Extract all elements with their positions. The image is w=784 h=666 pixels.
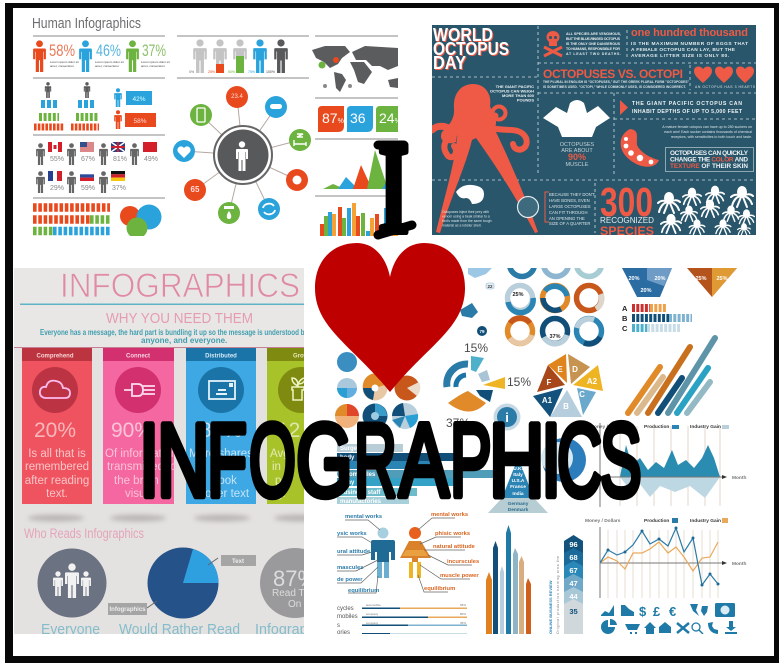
- human anatomy figures: de power: [337, 577, 363, 583]
- flag statistics: 59%: [81, 185, 95, 192]
- weight fact: THE GIANT PACIFIC: [496, 84, 534, 89]
- info pin: i: [505, 410, 509, 425]
- human anatomy figures: mental works: [345, 514, 382, 520]
- one hundred thousand fact: one hundred thousand: [631, 27, 748, 39]
- octopuses vs octopi: OCTOPUSES VS. OCTOPI: [543, 67, 683, 81]
- icon: three hearts: [694, 67, 756, 89]
- pyramid: U.S.A: [512, 478, 525, 484]
- heading: World Octopus Day: DAY: [433, 53, 466, 73]
- venom fact: IS THE ONLY ONE DANGEROUS: [566, 42, 621, 46]
- captions: [41, 621, 333, 638]
- flag statistics: 29%: [50, 185, 64, 192]
- filled people scale: 25%: [208, 70, 215, 74]
- card: distributed: over text: [205, 488, 250, 500]
- arrow stack: 96: [569, 540, 578, 549]
- title: INFOGRAPHICS: C: [557, 403, 602, 519]
- suckers text: [662, 125, 752, 139]
- muscle figure: [543, 100, 610, 168]
- funnel charts: 20%: [628, 276, 640, 282]
- card: distributed: book: [212, 475, 237, 487]
- stat cards: 87%: [322, 110, 344, 126]
- lower bars: 35%: [460, 621, 466, 625]
- percent figures: amet, consectetur: [141, 64, 165, 68]
- abc pictogram rows: C: [622, 324, 628, 333]
- rocket bars: [486, 525, 531, 634]
- muscle figure: MUSCLE: [566, 162, 589, 168]
- funnel charts: [622, 268, 737, 297]
- captions: Would Rather Read: [119, 621, 240, 638]
- pyramid: [488, 458, 548, 513]
- one hundred thousand fact: AVERAGE LITTER SIZE IS ONLY 80.: [631, 53, 729, 59]
- arrow stack: 47: [569, 579, 578, 588]
- pyramid: U.K.: [513, 466, 523, 472]
- percent figures: amet, consectetur: [95, 64, 119, 68]
- icon: quarter coin: [518, 196, 538, 218]
- human anatomy figures: equilibrium: [424, 586, 455, 592]
- heading: World Octopus Day: OCTOPUS: [433, 39, 509, 59]
- circle: everyone: [38, 548, 106, 618]
- lower bars: mobiles: [337, 614, 358, 620]
- human anatomy figures: ysic works: [337, 531, 367, 537]
- people pyramids: [34, 82, 99, 127]
- venom fact: ALL SPECIES ARE VENOMOUS,: [566, 32, 621, 36]
- depths fact: [620, 100, 743, 115]
- card: comprehend: after reading: [25, 475, 89, 487]
- horizontal bars: [337, 444, 497, 505]
- card: connect: 90%: [111, 419, 153, 442]
- venom fact: AT LEAST TWO DEATHS.: [566, 52, 621, 56]
- pentagon chart: E: [557, 365, 563, 374]
- flag statistics: 49%: [144, 156, 158, 163]
- abc pictogram rows: B: [622, 314, 628, 323]
- venom fact: BUT THE BLUE-RINGED OCTOPUS: [566, 37, 621, 41]
- heading: INFOGRAPHICS: INFOGRAPHICS: [60, 267, 300, 305]
- flag statistics: 67%: [81, 156, 95, 163]
- pie chart: Text: [232, 559, 244, 565]
- quarter fact: [545, 192, 595, 226]
- heading: World Octopus Day: [433, 28, 510, 70]
- hub diagram: 65: [191, 185, 200, 194]
- circle: 87 percent: 87%: [273, 566, 317, 591]
- title: INFOGRAPHICS: I: [139, 403, 159, 519]
- depths fact: THE GIANT PACIFIC OCTOPUS CAN: [632, 101, 742, 107]
- pentagon chart: F: [547, 378, 552, 387]
- icon: beak: bird's made from the same tough: [442, 219, 492, 223]
- lower bars: [337, 603, 467, 636]
- pentagon chart: A1: [542, 396, 553, 405]
- intro text: [40, 329, 304, 344]
- pyramid: India: [512, 491, 524, 497]
- icon: beak: [442, 185, 492, 228]
- icon: beak: venom using a beak similar to a: [442, 214, 490, 218]
- venn diagram: [120, 204, 162, 238]
- arrow stack: Original production earning area the: [556, 556, 560, 634]
- human anatomy figures: equilibrium: [348, 588, 379, 594]
- title: INFOGRAPHICS: S: [600, 403, 642, 519]
- arrow stack: 68: [569, 553, 578, 562]
- weight fact: POUNDS: [517, 98, 534, 102]
- title: INFOGRAPHICS: H: [489, 403, 545, 519]
- horizontal bars: body: [340, 455, 355, 461]
- arrow stack: 35: [569, 607, 578, 616]
- title: INFOGRAPHICS: N: [157, 403, 210, 519]
- pie chart: [108, 548, 256, 618]
- title: INFOGRAPHICS: F: [207, 403, 247, 519]
- card: grow: [267, 348, 324, 504]
- human anatomy figures: muscle power: [440, 573, 479, 579]
- pentagon chart: D: [572, 365, 578, 374]
- icon row: business symbols: €: [669, 604, 676, 619]
- pyramid: France: [510, 484, 526, 490]
- title: INFOGRAPHICS: A: [399, 403, 449, 519]
- one hundred thousand fact: A FEMALE OCTOPUS CAN LAY, BUT THE: [631, 47, 736, 53]
- card: connect: Connect: [126, 354, 150, 360]
- stat cards: 36: [350, 110, 366, 126]
- diagonal bars: [628, 338, 715, 413]
- title: INFOGRAPHICS: R: [354, 401, 397, 518]
- pentagon chart: [533, 354, 603, 417]
- donut charts: [508, 252, 602, 344]
- filled people scale: [189, 39, 288, 74]
- circle: 87 percent: [260, 548, 330, 618]
- panel: world octopus day: [432, 25, 756, 238]
- gender bars: [114, 88, 156, 129]
- suckers text: receptors, with sensitivities to both touch and taste.: [671, 135, 752, 139]
- card: grow: p: [275, 475, 281, 487]
- quarter fact: CAN FIT THROUGH: [549, 210, 587, 215]
- panel: human infographics: [32, 16, 401, 238]
- card: grow: 12: [277, 419, 300, 442]
- lower bars: cycles: [337, 606, 354, 612]
- percent figures: 58%: [49, 41, 75, 60]
- weight fact: OCTOPUS CAN WEIGH: [490, 88, 534, 94]
- quarter fact: SIZE OF A QUARTER: [549, 221, 590, 226]
- heading: World Octopus Day: DAY: [434, 54, 467, 74]
- percent figures: Lorem ipsum dolor sit: [95, 60, 124, 64]
- one hundred thousand fact: IS THE MAXIMUM NUMBER OF EGGS THAT: [631, 41, 748, 47]
- suckers text: each arm! Each sucker contains thousands of chemical: [664, 130, 752, 134]
- quarter fact: AN OPENING THE: [549, 216, 585, 221]
- card shadows: [28, 514, 326, 522]
- flag statistics: 55%: [50, 156, 64, 163]
- card: connect: Of information: [105, 448, 177, 460]
- globe: [541, 438, 586, 482]
- pyramid: Italy: [513, 472, 523, 478]
- icon: red heart: [315, 243, 465, 392]
- stat cards: 24%: [379, 110, 401, 126]
- hub diagram: 23.4: [231, 94, 243, 100]
- triangle chart: [323, 150, 386, 189]
- card: comprehend: Is all that is: [28, 448, 86, 460]
- card: comprehend: 20%: [34, 419, 76, 442]
- icon: beak: material as a lobster shell.: [442, 224, 481, 228]
- pentagon chart: C: [579, 390, 585, 399]
- world map: [312, 46, 398, 92]
- bar chart: [320, 203, 398, 236]
- area chart: Production: [644, 424, 669, 430]
- captions: Infographics: [255, 621, 333, 638]
- card: comprehend: Comprehend: [36, 354, 74, 360]
- icon row: business symbols: £: [653, 604, 661, 619]
- filled people scale: 50%: [228, 70, 235, 74]
- depths fact: INHABIT DEPTHS OF UP TO 5,000 FEET: [632, 109, 743, 115]
- map fragment: 79: [479, 329, 485, 334]
- lower bars: automobile: [366, 603, 381, 607]
- title: INFOGRAPHICS: O: [249, 403, 296, 519]
- venom fact: [566, 32, 621, 56]
- filled people scale: 100%: [266, 70, 275, 74]
- card: connect: the brain is: [114, 475, 171, 487]
- arrow stack: 44: [569, 592, 578, 601]
- heading: Human Infographics: Human Infographics: [32, 16, 141, 32]
- abc pictogram rows: A: [622, 304, 628, 313]
- 300 recognized species: SPECIES: [600, 224, 654, 238]
- muscle figure: 90%: [568, 152, 586, 162]
- venom fact: TO HUMANS, RESPONSIBLE FOR: [566, 47, 620, 51]
- title: INFOGRAPHICS: G: [296, 403, 353, 519]
- arrow stack: 67: [569, 566, 578, 575]
- icon: three hearts: AN OCTOPUS HAS 3 HEARTS: [695, 85, 756, 89]
- gender bars: 42%: [132, 96, 146, 103]
- donut labels: 37%: [549, 334, 561, 340]
- intro text: Everyone has a message, the hard part is bundling it up so the message is understood by: [40, 328, 308, 337]
- quarter fact: HAVE BONES, EVEN: [549, 198, 590, 203]
- percent figures: Lorem ipsum dolor sit: [50, 60, 79, 64]
- pie chart grid: [335, 352, 420, 429]
- lower bars: s: [337, 623, 340, 629]
- human anatomy figures: phisic works: [435, 531, 470, 537]
- heading: who reads infographics: Who Reads Infographics: [24, 526, 144, 541]
- subheading: why you need them: WHY YOU NEED THEM: [106, 311, 253, 327]
- line chart: Industry Gain: [690, 518, 721, 524]
- color change callout: CHANGE THE COLOR AND: [670, 156, 748, 164]
- circle: 87 percent: Read T: [272, 588, 305, 599]
- suckers text: A mature female octopus can have up to 280 suckers on: [662, 125, 752, 129]
- abc pictogram rows: [622, 304, 692, 333]
- card: distributed: More shares: [189, 448, 253, 460]
- card: grow: ogi: [270, 488, 285, 500]
- line chart: Production: [644, 518, 669, 524]
- card: connect: transmitted to: [107, 461, 177, 473]
- icon: beak: Octopuses inject their prey with: [442, 210, 489, 214]
- hub diagram: [173, 86, 311, 224]
- line chart: [585, 518, 746, 598]
- lower bars: 80%: [460, 612, 466, 616]
- horizontal bars: automobiles: [340, 472, 376, 478]
- card: grow: Grow: [293, 354, 309, 360]
- human anatomy figures: natural attitude: [433, 544, 476, 550]
- horizontal bars: army: [340, 480, 355, 486]
- captions: Everyone: [41, 621, 100, 638]
- title: INFOGRAPHICS: I: [541, 403, 561, 519]
- flag statistics: [36, 142, 158, 193]
- tentacle: [621, 129, 659, 167]
- percent figures: [33, 40, 170, 72]
- human anatomy figures: [337, 512, 479, 594]
- color change callout: TEXTURE OF THEIR SKIN: [670, 163, 748, 170]
- line chart: Month: [732, 561, 746, 567]
- radial chart: 15%: [464, 341, 488, 355]
- title: INFOGRAPHICS: P: [450, 403, 492, 519]
- filled people scale: 75%: [248, 70, 255, 74]
- horizontal bars: manufactories: [340, 499, 382, 505]
- area chart: Money / Dollars: [590, 424, 626, 430]
- lower bars: company: [366, 612, 379, 616]
- card: comprehend: remembered: [25, 461, 89, 473]
- panel: blue and orange infographics: [335, 252, 746, 636]
- funnel charts: 25%: [716, 276, 728, 282]
- octopuses vs octopi: [543, 70, 689, 89]
- gender bars: 58%: [133, 118, 147, 125]
- heading: World Octopus Day: WORLD: [434, 26, 494, 46]
- lower bars: company: [366, 621, 379, 625]
- one hundred thousand fact: [631, 27, 748, 59]
- card: comprehend: [22, 348, 92, 504]
- pentagon chart: A2: [587, 377, 598, 386]
- color change callout: [666, 148, 754, 172]
- icon: skull: [544, 31, 562, 56]
- percent figures: amet, consectetur: [50, 64, 74, 68]
- circle: 87 percent: On: [288, 599, 301, 610]
- title: INFOGRAPHICS: [139, 401, 642, 519]
- color change callout: OCTOPUSES CAN QUICKLY: [670, 150, 749, 157]
- horizontal bars: business staff: [340, 490, 381, 496]
- card: connect: [103, 348, 177, 504]
- pentagon chart: B: [563, 402, 569, 411]
- pyramid: Germany: [508, 501, 529, 507]
- card: distributed: [186, 348, 256, 504]
- muscle figure: OCTOPUSES: [560, 142, 595, 148]
- icon row: business symbols: $: [639, 604, 647, 619]
- card: comprehend: text.: [46, 488, 68, 500]
- people rows: [33, 208, 110, 231]
- funnel charts: 20%: [640, 288, 652, 294]
- pyramid: Denmark: [508, 507, 529, 513]
- lower bars: 65%: [460, 603, 466, 607]
- map fragment: [460, 268, 494, 336]
- radial chart: [446, 341, 531, 430]
- map fragment: 22: [487, 284, 493, 289]
- small octopus silhouettes: [658, 186, 754, 235]
- human anatomy figures: mascules: [337, 565, 363, 571]
- 300 recognized species: RECOGNIZED: [600, 216, 654, 225]
- 300 recognized species: 300: [600, 179, 653, 225]
- info pin: [494, 404, 520, 430]
- arrow stack: [548, 535, 583, 634]
- flag statistics: 81%: [113, 156, 127, 163]
- percent figures: Lorem ipsum dolor sit: [141, 60, 170, 64]
- intro text: anyone, and everyone.: [141, 336, 227, 345]
- quarter fact: LARGE OCTOPUSES: [549, 204, 591, 209]
- stat cards: [318, 106, 401, 132]
- line chart: Money / Dollars: [585, 518, 621, 524]
- heading: World Octopus Day: OCTOPUS: [434, 40, 510, 60]
- octopuses vs octopi: THE PLURAL IN ENGLISH IS "OCTOPUSES," BUT THE GREEK PLURAL FORM "OCTOPODES": [543, 80, 689, 84]
- card: grow: Avg: [270, 448, 290, 460]
- card: distributed: Distributed: [205, 354, 237, 360]
- octopuses vs octopi: IS SOMETIMES USED. "OCTOPI," WHILE COMMONLY USED, IS CONSIDERED INCORRECT.: [543, 85, 686, 89]
- human anatomy figures: ural attitude: [337, 549, 371, 555]
- filled people scale: 0%: [189, 70, 194, 74]
- card: distributed: 85%: [200, 419, 242, 442]
- radial chart: 15%: [507, 375, 531, 389]
- card: distributed: and on: [210, 461, 245, 473]
- 300 recognized species: [600, 188, 654, 235]
- percent figures: 46%: [96, 41, 121, 60]
- pie chart: Infographics: [109, 607, 146, 613]
- funnel charts: 20%: [654, 276, 666, 282]
- heading: World Octopus Day: WORLD: [433, 25, 493, 45]
- icon row: business symbols: [601, 603, 737, 634]
- quarter fact: BECAUSE THEY DON'T: [549, 192, 595, 197]
- area chart: Month: [732, 475, 746, 481]
- panel: why you need infographics: [14, 268, 304, 634]
- muscle figure: ARE ABOUT: [561, 148, 593, 154]
- donut labels: [512, 292, 561, 340]
- horizontal bars: Surgery: [340, 446, 363, 452]
- card: connect: visual: [125, 488, 154, 500]
- arrow stack: ONLINE BUSINESS REVIEW: [548, 580, 553, 634]
- giant octopus silhouette: [432, 84, 538, 233]
- flag statistics: 37%: [112, 185, 126, 192]
- radial chart: 37%: [446, 416, 470, 430]
- weight fact: MORE THAN 600: [502, 93, 535, 98]
- big letter I: I: [378, 118, 409, 261]
- human anatomy figures: incurscules: [447, 559, 479, 565]
- funnel charts: 25%: [695, 276, 707, 282]
- percent figures: 37%: [142, 41, 166, 60]
- lower bars: ories: [337, 630, 350, 636]
- area chart: [590, 423, 746, 507]
- human anatomy figures: mental works: [431, 512, 468, 518]
- weight fact: [490, 86, 534, 102]
- card: grow: in: [272, 461, 281, 473]
- area chart: Industry Gain: [690, 424, 721, 430]
- donut labels: 25%: [512, 292, 524, 298]
